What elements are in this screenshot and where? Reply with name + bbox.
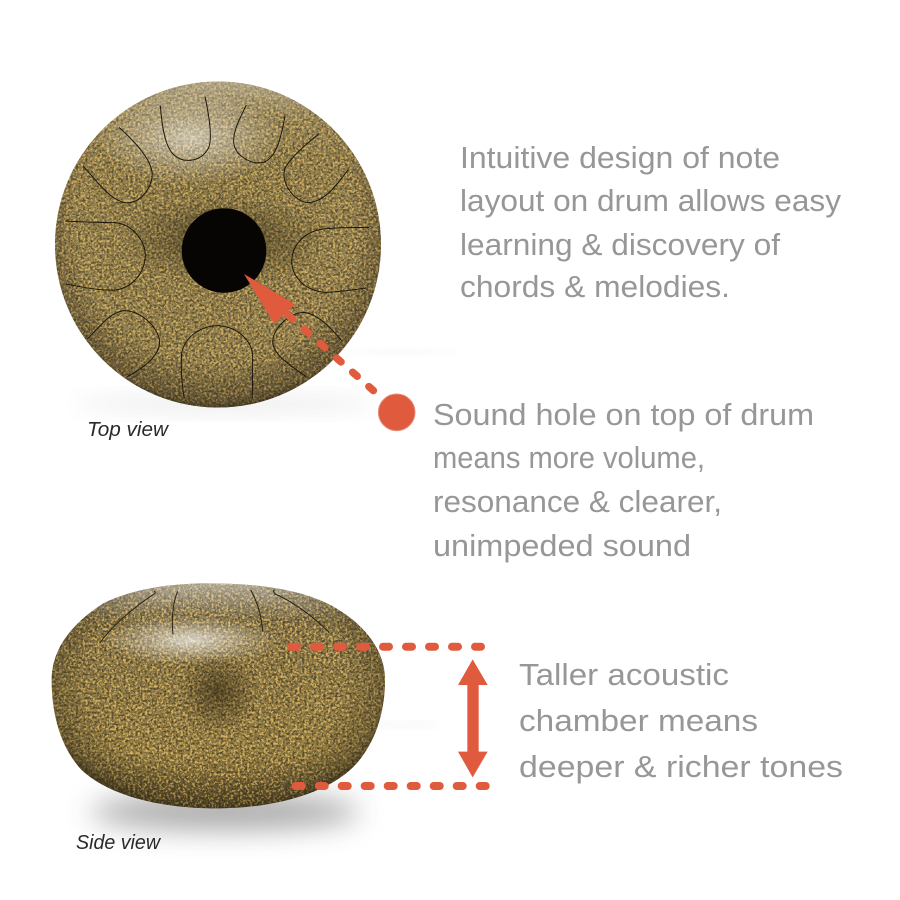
photo: side view of tongue drum <box>52 583 385 848</box>
text block: acoustic chamber: Taller acoustic <box>519 658 729 692</box>
note tongues <box>65 97 369 398</box>
height marker: dotted lines and double arrow <box>291 647 488 786</box>
text block: note layout: Intuitive design of note <box>460 141 780 175</box>
text block: sound hole: unimpeded sound <box>433 529 691 563</box>
text block: acoustic chamber <box>519 658 843 784</box>
text block: note layout <box>460 141 842 304</box>
text block: note layout: learning & discovery of <box>460 228 781 262</box>
text block: sound hole: resonance & clearer, <box>433 485 722 519</box>
text block: sound hole: means more volume, <box>433 441 705 475</box>
caption: top view: Top view <box>87 419 170 441</box>
arrow: pointer to sound hole <box>244 274 415 431</box>
text block: sound hole: Sound hole on top of drum <box>433 398 814 432</box>
text block: acoustic chamber: chamber means <box>519 704 758 738</box>
text block: sound hole <box>433 398 814 563</box>
photo: top view of tongue drum <box>55 82 381 412</box>
caption: side view: Side view <box>76 832 162 854</box>
text block: note layout: chords & melodies. <box>460 270 730 304</box>
text block: acoustic chamber: deeper & richer tones <box>519 750 843 784</box>
note tongue edges <box>100 589 329 643</box>
text block: note layout: layout on drum allows easy <box>460 184 842 218</box>
sound hole <box>182 208 266 293</box>
